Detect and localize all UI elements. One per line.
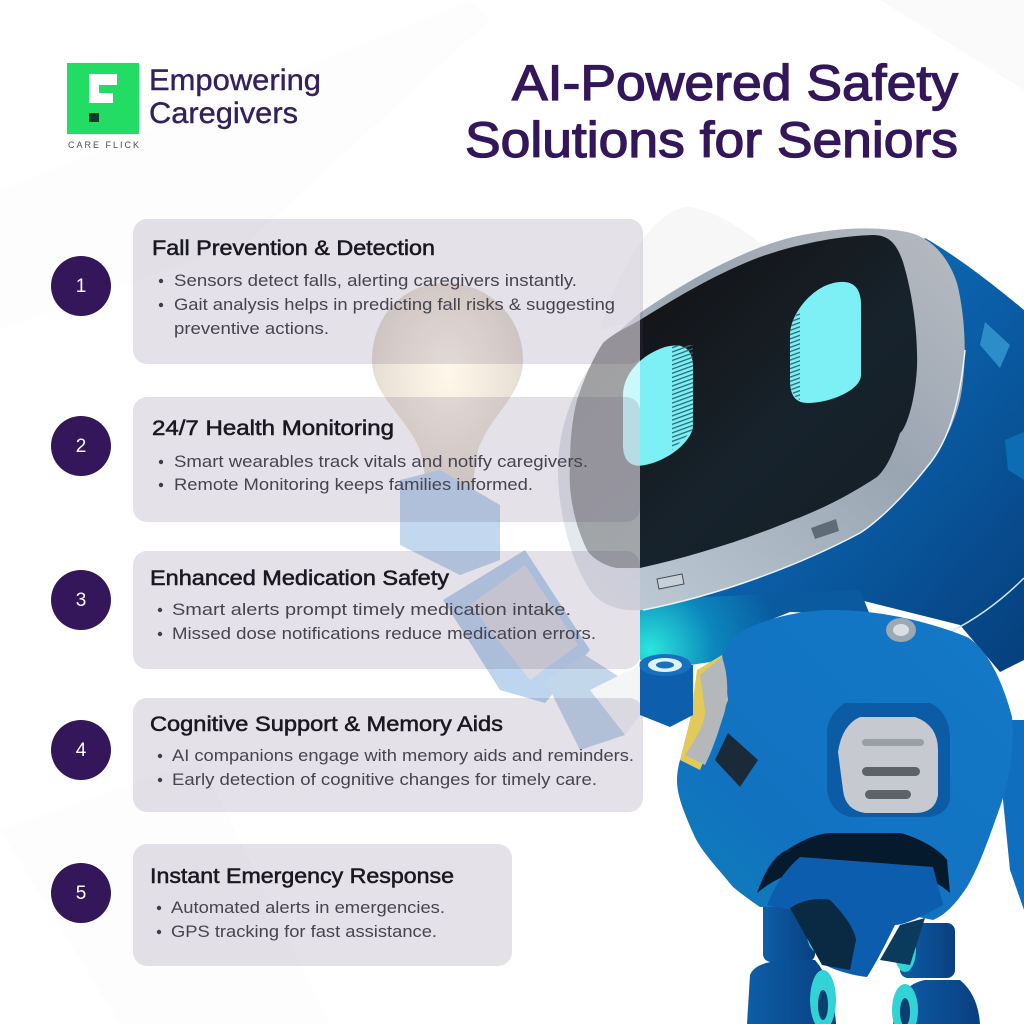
number badge 4: 4 [76, 740, 87, 761]
robot arm holding bulb [400, 470, 640, 750]
heading 2: 24/7 Health Monitoring [152, 417, 394, 440]
bullets 4 [158, 746, 634, 789]
bullets 1 [159, 271, 615, 338]
title: Solutions for Seniors [465, 112, 958, 168]
number badge 3 [51, 570, 111, 630]
robot right arm [1003, 720, 1024, 910]
robot legs [747, 900, 980, 1024]
bullets 1: Gait analysis helps in predicting fall risks & suggesting [174, 295, 615, 314]
logo tagline: Empowering [149, 64, 321, 97]
bullets 3: Smart alerts prompt timely medication intake. [172, 600, 571, 619]
number badge 1: 1 [76, 276, 86, 297]
collar [757, 833, 950, 893]
heading 4: Cognitive Support & Memory Aids [150, 713, 503, 736]
panel: emergency response [51, 844, 512, 966]
heading 3: Enhanced Medication Safety [150, 567, 450, 590]
leg: upper right [900, 923, 955, 978]
chest vent [827, 703, 950, 817]
number badge 2: 2 [76, 436, 86, 457]
bullets 2 [159, 452, 588, 494]
teal glow under head [640, 590, 870, 665]
number badge 2 [51, 416, 111, 476]
robot head [558, 228, 1024, 672]
head side detail [980, 322, 1010, 368]
bullets 2: Smart wearables track vitals and notify caregivers. [174, 452, 588, 471]
number badge 4 [51, 720, 111, 780]
rim edge highlight [643, 350, 965, 610]
bullets 5: Automated alerts in emergencies. [171, 898, 445, 917]
robot shoulder joint [639, 654, 728, 770]
bullets 2: Remote Monitoring keeps families informed. [174, 475, 533, 494]
panel: fall prevention [51, 219, 643, 364]
panel: cognitive support [51, 698, 643, 812]
leg wheels [806, 904, 828, 952]
number badge 3: 3 [76, 590, 86, 611]
screen [570, 235, 917, 568]
number badge 5: 5 [76, 883, 86, 904]
background light bulb [372, 283, 523, 500]
logo mark [67, 63, 139, 134]
number badge 1 [51, 256, 111, 316]
logo: Caregivers [149, 97, 298, 130]
right eye [790, 282, 861, 403]
bullets 5: GPS tracking for fast assistance. [171, 922, 437, 941]
side chip [715, 733, 758, 787]
bullets 3 [158, 600, 596, 643]
leg: upper left [763, 900, 815, 962]
pelvis [767, 857, 943, 977]
leg: lower left [747, 960, 836, 1024]
panel: medication safety [51, 551, 640, 669]
logo [67, 63, 321, 150]
top button [886, 618, 916, 642]
title: AI-Powered Safety [512, 55, 958, 111]
bullets 4: Early detection of cognitive changes for timely care. [172, 770, 597, 789]
bullets 3: Missed dose notifications reduce medication errors. [172, 624, 596, 643]
left eye [623, 345, 693, 466]
number badge 5 [51, 863, 111, 923]
silver rim [558, 228, 965, 610]
heading 5: Instant Emergency Response [150, 865, 454, 888]
bullets 4: AI companions engage with memory aids and reminders. [172, 746, 634, 765]
bullets 1: Sensors detect falls, alerting caregivers instantly. [174, 271, 577, 290]
leg: lower right [893, 980, 980, 1024]
bullets 1: preventive actions. [174, 319, 329, 338]
logo caption: CARE FLICK [68, 140, 139, 150]
panel: health monitoring [51, 397, 640, 522]
robot torso [677, 610, 1013, 977]
white wash over left image area [0, 0, 640, 1024]
head shell [640, 238, 1024, 672]
title [465, 55, 958, 168]
side sensors [811, 519, 839, 539]
bullets 5 [157, 898, 445, 941]
heading 1: Fall Prevention & Detection [152, 237, 435, 260]
